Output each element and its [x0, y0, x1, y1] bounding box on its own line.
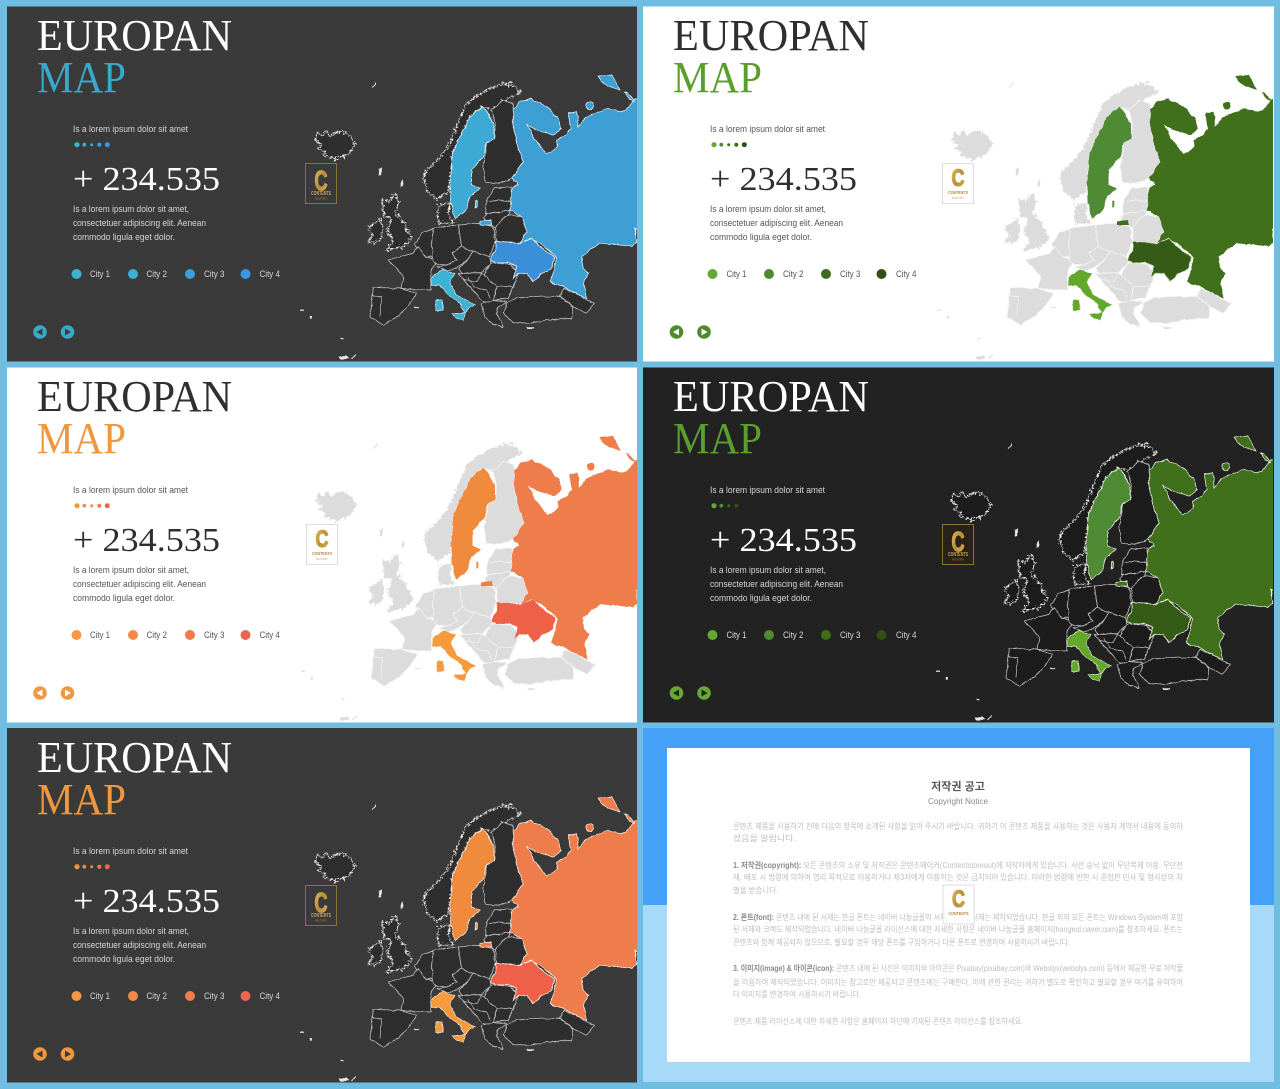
panel: orange on dark slide — [7, 728, 647, 1082]
description: consectetuer adipiscing elit. Aenean — [710, 218, 843, 228]
legend: City 3 — [840, 630, 860, 640]
legend: City 1 — [90, 269, 110, 279]
title: MAP — [37, 413, 126, 463]
description: commodo ligula eget dolor. — [710, 232, 812, 242]
logo: C — [314, 165, 328, 196]
notice intro: 콘텐츠 제품을 사용하기 전에 다음의 항목에 소개된 사항을 읽어 주시기 바랍니다. 귀하가 이 콘텐츠 제품을 사용하는 것은 사용자 계약서 내용에 동의하 — [733, 821, 1184, 831]
description — [710, 565, 843, 603]
description: consectetuer adipiscing elit. Aenean — [73, 218, 206, 228]
description: Is a lorem ipsum dolor sit amet, — [73, 926, 189, 936]
legend: City 2 — [783, 630, 804, 640]
legend: City 4 — [260, 630, 280, 640]
description: Is a lorem ipsum dolor sit amet, — [73, 204, 189, 214]
description: Is a lorem ipsum dolor sit amet, — [73, 565, 189, 575]
title — [673, 10, 869, 102]
legend: City 1 — [90, 991, 110, 1001]
description: consectetuer adipiscing elit. Aenean — [73, 579, 206, 589]
description: commodo ligula eget dolor. — [73, 954, 175, 964]
legend — [708, 630, 916, 640]
notice footer: 콘텐츠 제품 라이선스에 대한 자세한 사항은 홈페이지 하단에 기재된 콘텐츠 라이선스를 참조하세요. — [733, 1016, 1023, 1026]
logo: CONTENTS — [948, 911, 968, 916]
logo: FACTORY — [952, 558, 964, 562]
description — [710, 204, 843, 242]
logo — [942, 164, 974, 204]
map of Europe — [937, 75, 1280, 359]
description: Is a lorem ipsum dolor sit amet, — [710, 565, 826, 575]
statistic: + 234.535 — [710, 161, 857, 198]
navigation arrows — [670, 686, 711, 700]
logo: CONTENTS — [311, 913, 331, 919]
statistic: + 234.535 — [73, 522, 220, 559]
notice clause 3: 다 이미지를 변경하여 사용하시기 바랍니다. — [733, 989, 861, 999]
legend: City 4 — [896, 630, 916, 640]
logo: C — [952, 526, 964, 557]
title — [37, 10, 232, 102]
description — [73, 565, 206, 603]
notice intro: 셨음을 알립니다. — [733, 833, 796, 843]
panel: blue on dark slide — [7, 6, 647, 362]
dot row — [711, 142, 747, 147]
description: Is a lorem ipsum dolor sit amet, — [710, 204, 826, 214]
logo — [942, 524, 974, 564]
logo: C — [314, 887, 328, 918]
notice clause 1 — [733, 860, 1183, 895]
legend: City 1 — [726, 630, 746, 640]
logo: FACTORY — [315, 918, 327, 922]
legend: City 2 — [146, 269, 167, 279]
notice clause 2: 된 서체와 크랙도 제작되었습니다. 네이버 나눔글꼴 라이선스에 대한 자세한 사항은 네이버 나눔글꼴 홈페이지(hangeul.naver.com)를 참조하세요. 폰트는 — [733, 924, 1183, 934]
legend — [72, 991, 280, 1001]
logo: CONTENTS — [948, 190, 968, 195]
logo — [943, 885, 974, 924]
subtitle: Is a lorem ipsum dolor sit amet — [710, 485, 825, 495]
legend: City 3 — [204, 269, 224, 279]
legend — [708, 269, 916, 279]
notice clause 1: 벌을 받습니다. — [733, 885, 778, 895]
logo — [306, 886, 336, 926]
legend: City 3 — [840, 269, 860, 279]
legend — [72, 630, 280, 640]
description: consectetuer adipiscing elit. Aenean — [710, 579, 843, 589]
logo: FACTORY — [952, 196, 964, 200]
legend: City 3 — [204, 991, 224, 1001]
dot row — [74, 503, 110, 508]
navigation arrows — [33, 1047, 74, 1061]
legend: City 2 — [783, 269, 804, 279]
subtitle: Is a lorem ipsum dolor sit amet — [73, 124, 188, 134]
title: EUROPAN — [37, 10, 232, 60]
panel: green on white slide — [643, 6, 1280, 362]
notice heading: 저작권 공고 — [931, 779, 985, 793]
description: commodo ligula eget dolor. — [73, 232, 175, 242]
navigation arrows — [670, 325, 711, 339]
panel: copyright notice — [643, 728, 1274, 1082]
logo: FACTORY — [316, 557, 328, 561]
navigation arrows — [33, 686, 74, 700]
title — [37, 732, 232, 824]
logo: C — [952, 886, 965, 913]
legend: City 4 — [260, 991, 280, 1001]
notice subheading: Copyright Notice — [928, 797, 989, 806]
title: EUROPAN — [37, 732, 232, 782]
navigation arrows — [33, 325, 74, 339]
logo: C — [316, 526, 328, 553]
statistic: + 234.535 — [73, 883, 220, 920]
title: MAP — [673, 413, 762, 463]
logo: CONTENTS — [311, 191, 331, 197]
description: commodo ligula eget dolor. — [73, 593, 175, 603]
dot row — [74, 142, 110, 147]
map of Europe — [301, 436, 648, 720]
notice clause 1: 1. 저작권(copyright): 모든 콘텐츠의 소유 및 저작권은 콘텐츠메이커(Contentstoreout)에 저작자에게 있습니다. 사전 승낙 없이 무단복제 이용, 무단전 — [733, 860, 1183, 870]
dot row — [711, 503, 738, 508]
title — [673, 371, 869, 463]
description — [73, 204, 206, 242]
notice clause 3: 3. 이미지(image) & 아이콘(icon): 콘텐츠 내에 된 사진은 이미지와 아이콘은 Pixabay(pixabay.com)와 Webolys(webolys.com) 등에서 제공한 무료 저작물 — [733, 963, 1183, 973]
notice clause 2 — [733, 912, 1184, 947]
notice clause 3: 을 이용하여 제작되었습니다. 이미지는 참고로만 제공되고 콘텐츠에는 구매한다. 이에 관한 권리는 귀하가 별도로 확인하고 필요할 경우 여기를 유의하여 — [733, 977, 1183, 987]
title: MAP — [37, 52, 126, 102]
legend: City 4 — [260, 269, 280, 279]
title: EUROPAN — [37, 371, 232, 421]
subtitle: Is a lorem ipsum dolor sit amet — [710, 124, 825, 134]
notice clause 3 — [733, 963, 1183, 999]
subtitle: Is a lorem ipsum dolor sit amet — [73, 846, 188, 856]
description: consectetuer adipiscing elit. Aenean — [73, 940, 206, 950]
map of Europe — [936, 436, 1280, 720]
legend: City 3 — [204, 630, 224, 640]
legend: City 1 — [90, 630, 110, 640]
logo: FACTORY — [315, 196, 327, 200]
title — [37, 371, 232, 463]
subtitle: Is a lorem ipsum dolor sit amet — [73, 485, 188, 495]
map of Europe — [300, 75, 647, 359]
description — [73, 926, 206, 964]
title: EUROPAN — [673, 10, 869, 60]
notice intro — [733, 821, 1184, 843]
logo: CONTENTS — [948, 552, 968, 558]
notice clause 1: 재, 배포 시 법령에 의하여 영리 목적으로 이용하거나 제3자에게 이용하는 것은 금지되어 있습니다. 이러한 법령에 반한 시 준엄한 민사 및 형사상의 처 — [733, 872, 1183, 882]
description: commodo ligula eget dolor. — [710, 593, 812, 603]
title: EUROPAN — [673, 371, 869, 421]
legend — [72, 269, 280, 279]
map of Europe — [300, 797, 647, 1081]
title: MAP — [37, 774, 126, 824]
notice clause 2: 2. 폰트(font): 콘텐츠 내에 된 서체는 한글 폰트는 네이버 나눔글꼴의 서체로, 영문 서체는 제작되었습니다. 한글 외의 모든 폰트는 Windows System에 포함 — [733, 912, 1184, 922]
legend: City 2 — [146, 630, 167, 640]
logo — [306, 524, 338, 564]
panel: green on black slide — [643, 368, 1280, 722]
legend: City 1 — [726, 269, 746, 279]
logo: C — [952, 165, 964, 192]
panel: orange on white slide — [7, 368, 648, 722]
legend: City 4 — [896, 269, 916, 279]
statistic: + 234.535 — [710, 522, 857, 559]
legend: City 2 — [146, 991, 167, 1001]
logo: CONTENTS — [312, 551, 332, 556]
statistic: + 234.535 — [73, 161, 220, 198]
notice clause 2: 콘텐츠와 함께 제공되지 않으므로, 필요할 경우 해당 폰트를 구입하거나 다른 폰트로 변경하여 사용하시기 바랍니다. — [733, 937, 1070, 947]
dot row — [74, 864, 110, 869]
title: MAP — [673, 52, 762, 102]
logo — [306, 164, 336, 204]
